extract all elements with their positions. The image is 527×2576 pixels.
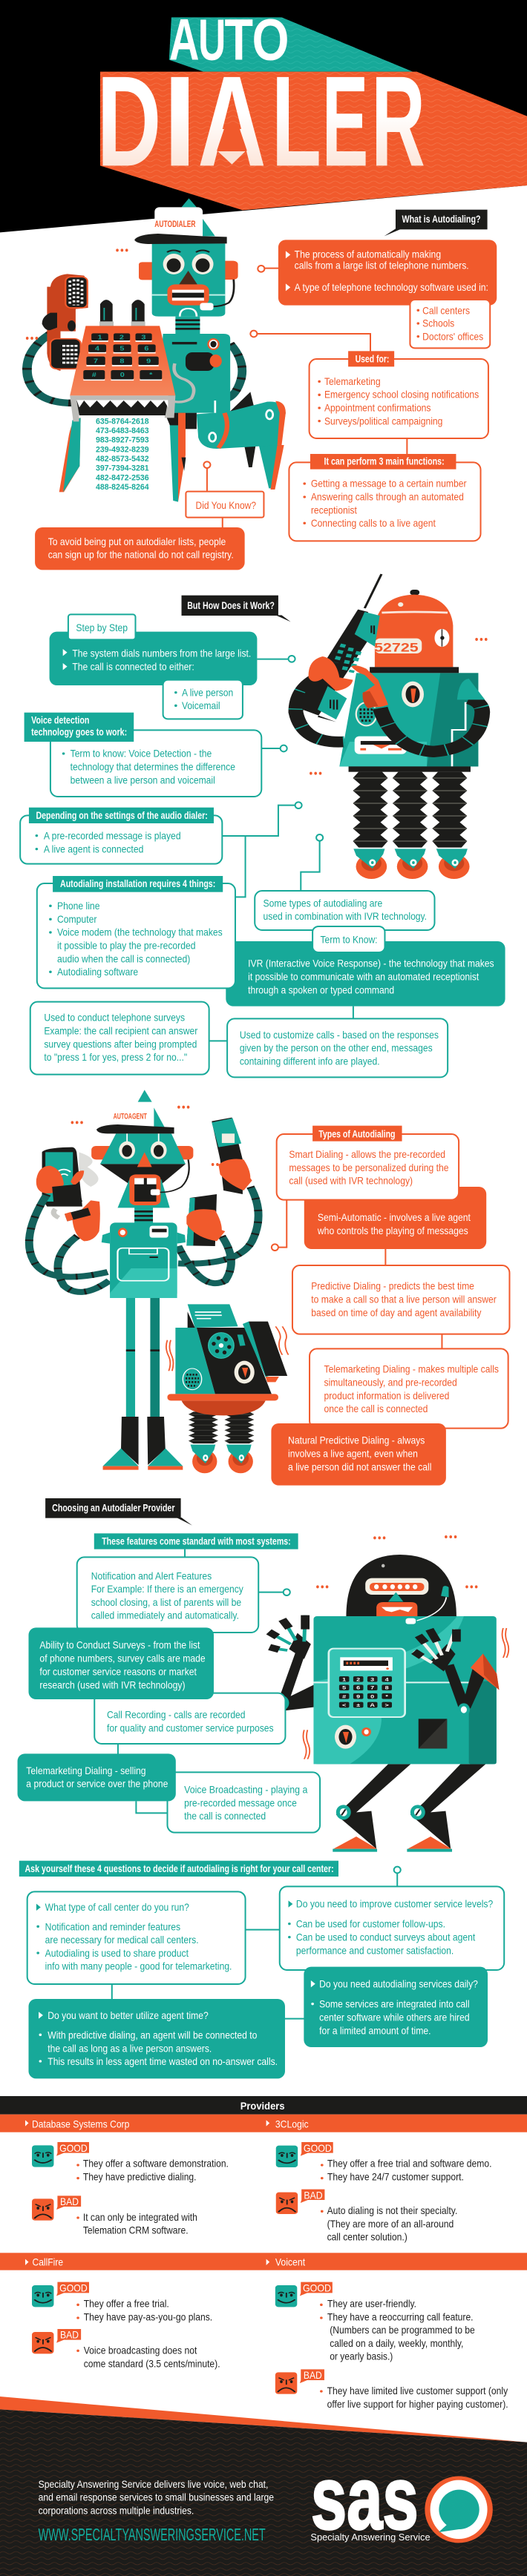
panel: three main functions: Connecting calls to a live agent — [311, 518, 436, 529]
panel: three main functions: receptionist — [311, 505, 357, 516]
provider: callfire: Voice broadcasting does not — [84, 2345, 197, 2356]
list: phone numbers: 473-6483-8463 — [96, 426, 149, 435]
panel: voice broadcasting — [167, 1772, 320, 1833]
section: header — [0, 0, 527, 306]
panel: where used: Call centers — [422, 306, 470, 317]
panel: do not call: can sign up for the national do not call registry. — [48, 550, 234, 561]
label: term to know — [312, 926, 384, 952]
panel: step by step — [50, 614, 257, 685]
heading: standard features — [94, 1533, 298, 1549]
panel: conduct surveys: Ability to Conduct Surveys - from the list — [39, 1640, 200, 1651]
panel: conduct surveys: research (used with IVR technology) — [39, 1680, 185, 1691]
panel: telemarketing dialing: simultaneously, and pre-recorded — [324, 1377, 457, 1389]
panel: customer service levels: Can be used for customer follow-ups. — [296, 1919, 445, 1930]
list: phone numbers: 488-8245-8264 — [96, 482, 149, 492]
title: DIALER: E — [322, 49, 368, 193]
panel: autodialing installation: Autodialing installation requires 4 things: — [60, 878, 215, 889]
panel: where used: Schools — [422, 318, 454, 329]
panel: used for: Used for: — [356, 354, 389, 365]
section: choosing a provider — [18, 1498, 508, 1852]
orange shadow behind DIALER — [100, 72, 527, 210]
bar: database systems and 3clogic — [0, 2115, 527, 2132]
panel: autodialing installation: Computer — [57, 914, 97, 925]
connector ring — [261, 745, 287, 751]
section: types of autodialing — [29, 1126, 509, 1486]
robot body and keypad — [27, 274, 286, 502]
panel: telemarketing dialing: once the call is connected — [324, 1403, 428, 1414]
robot: briefcase robot: # — [342, 1693, 347, 1699]
provider: voicent: or yearly basis.) — [330, 2351, 393, 2362]
provider: callfire — [32, 2282, 220, 2370]
provider: database systems corp: BAD — [60, 2196, 79, 2207]
heading: choosing a provider: Choosing an Autodialer Provider — [52, 1503, 175, 1514]
heading: providers — [0, 2096, 527, 2115]
panel: live person or voicemail: A live person — [182, 688, 233, 699]
provider: database systems corp: It can only be integrated with — [83, 2212, 197, 2223]
robot body and keypad: # — [92, 372, 97, 379]
footer: orange stripe — [0, 2397, 527, 2442]
panel: voice broadcasting: pre-recorded message once — [184, 1798, 297, 1809]
panel: used for: Surveys/political campaigning — [324, 416, 442, 427]
panel: audio dialer settings — [20, 808, 222, 864]
panel: voice detection: technology that determines the difference — [71, 762, 235, 773]
connector ring — [203, 461, 223, 528]
robot: briefcase robot: 7 — [370, 1685, 375, 1690]
label: did you know — [186, 492, 264, 518]
label: term to know: Term to Know: — [321, 935, 378, 946]
robot: autoagent head and devices — [36, 1090, 252, 1208]
logo: sas: Specialty Answering Service — [310, 2532, 431, 2543]
panel: natural predictive dialing: involves a live agent, even when — [288, 1449, 418, 1460]
panel: notification and alert features: Notification and Alert Features — [91, 1571, 212, 1582]
panel: voice detection: between a live person and voicemail — [71, 775, 215, 786]
robot body and keypad: 6 — [144, 346, 148, 352]
panel: natural predictive dialing: Natural Predictive Dialing - always — [288, 1435, 425, 1446]
title: AUTO: O — [252, 7, 289, 72]
logo: sas: sas — [311, 2448, 419, 2548]
panel: voice broadcasting: Voice Broadcasting - playing a — [184, 1785, 308, 1796]
robot: autoagent body — [29, 1185, 258, 1470]
panel: used for: Appointment confirmations — [324, 403, 431, 414]
panel: call recording: for quality and customer service purposes — [107, 1723, 274, 1734]
title: AUTO: U — [198, 7, 226, 72]
footer: description — [39, 2479, 274, 2517]
section: header: R — [371, 49, 425, 193]
panel: notification and alert features: For Example: If there is an emergency — [91, 1584, 243, 1595]
robot body and keypad: * — [149, 372, 153, 379]
panel: semi-automatic — [304, 1187, 486, 1249]
panel: IVR definition: through a spoken or typed command — [248, 985, 394, 996]
panel: smart dialing: call (used with IVR technology) — [289, 1176, 413, 1187]
robot: briefcase robot: 9 — [356, 1693, 361, 1699]
title: DIALER: D — [96, 49, 161, 193]
panel: agent time: With predictive dialing, an agent will be connected to — [48, 2030, 257, 2041]
robot body and keypad: 2 — [120, 335, 124, 341]
list: phone numbers: 482-8472-2536 — [96, 472, 149, 482]
panel: agent time: the call as long as a live person answers. — [48, 2043, 212, 2055]
panel: conduct surveys — [28, 1627, 214, 1699]
provider: 3clogic — [276, 2142, 491, 2243]
provider: 3clogic: call center solution.) — [327, 2232, 407, 2243]
panel: customer service levels — [280, 1886, 504, 1970]
robot: briefcase robot: ± — [356, 1702, 361, 1708]
panel: live person or voicemail — [163, 680, 243, 719]
panel: smart dialing: Smart Dialing - allows the pre-recorded — [289, 1149, 445, 1160]
panel: where used — [410, 300, 490, 348]
robot body and keypad: 0 — [120, 372, 125, 379]
provider: database systems corp — [32, 2142, 229, 2236]
provider: callfire: BAD — [60, 2330, 79, 2341]
section: autodialer robot — [134, 198, 238, 317]
panel: definition — [278, 240, 497, 306]
panel: services daily — [304, 1967, 488, 2047]
title: DIALER: A — [197, 49, 266, 193]
provider: voicent — [275, 2282, 508, 2410]
robot: briefcase robot: > — [385, 1702, 389, 1708]
panel: agent time — [28, 1999, 285, 2078]
panel: audio dialer settings: Depending on the settings of the audio dialer: — [36, 810, 208, 821]
panel: predictive dialing — [292, 1265, 509, 1334]
panel: agent time: Do you want to better utilize agent time? — [48, 2010, 209, 2021]
panel: IVR combination: Some types of autodialing are — [264, 898, 382, 909]
provider: database systems corp: Telemation CRM software. — [83, 2225, 189, 2236]
panel: voice detection: Voice detection — [31, 715, 89, 726]
robot: briefcase robot: 2 — [356, 1676, 361, 1682]
panel: telemarketing dialing — [310, 1348, 508, 1429]
provider: voicent: BAD — [304, 2370, 322, 2381]
title: letter A notch — [217, 124, 247, 165]
connector lines — [385, 1249, 442, 1348]
provider: voicent: GOOD — [303, 2283, 331, 2294]
provider: 3clogic: (They are more of an all-around — [327, 2218, 454, 2230]
provider: voicent: They are user-friendly. — [327, 2299, 416, 2310]
panel: IVR definition — [226, 941, 505, 1007]
panel: step by step: Step by Step — [76, 622, 128, 633]
panel: IVR combination: used in combination with IVR technology. — [264, 911, 427, 922]
panel: do not call — [35, 527, 245, 570]
connector ring — [250, 331, 370, 352]
panel: autodialing installation: Phone line — [57, 900, 99, 912]
bar: database systems and 3clogic: 3CLogic — [275, 2119, 309, 2130]
robot: autodialer: AUTODIALER — [154, 220, 196, 229]
label: did you know: Did You Know? — [196, 500, 256, 511]
panel: used for: Telemarketing — [324, 376, 381, 387]
panel: autodialing installation — [37, 876, 235, 988]
panel: smart dialing: messages to be personalized during the — [289, 1162, 449, 1173]
title: AUTO: T — [224, 7, 253, 72]
robot body and keypad: 8 — [120, 358, 124, 365]
footer: description: corporations across multiple industries. — [39, 2506, 194, 2517]
provider: callfire: come standard (3.5 cents/minute). — [84, 2359, 220, 2370]
panel: type of call center: Notification and reminder features — [45, 1922, 180, 1933]
panel: autodialing installation: Autodialing software — [57, 966, 138, 978]
panel: notification and alert features — [77, 1557, 258, 1633]
panel: smart dialing — [277, 1126, 459, 1200]
panel: audio dialer settings: A live agent is connected — [44, 844, 143, 855]
provider: 3clogic: GOOD — [304, 2143, 332, 2154]
panel: three main functions — [289, 454, 481, 541]
robot body and keypad: 9 — [146, 358, 151, 365]
list: phone numbers: 635-8764-2618 — [96, 416, 149, 426]
robot: phone robot — [295, 574, 485, 879]
panel: natural predictive dialing: a live person did not answer the call — [288, 1462, 431, 1473]
title: DIALER: L — [272, 49, 321, 193]
dots — [26, 248, 337, 493]
panel: telephone surveys — [30, 1002, 209, 1075]
list: phone numbers: 482-8573-5432 — [96, 454, 149, 464]
panel: type of call center: Autodialing is used to share product — [45, 1948, 189, 1959]
text: WWW.SPECIALTYANSWERINGSERVICE.NET — [39, 2525, 266, 2544]
bar: callfire and voicent: Voicent — [275, 2257, 305, 2268]
teal shadow behind AUTO — [169, 17, 413, 72]
robot: briefcase robot — [269, 1555, 508, 1852]
panel: services daily: for a limited amount of time. — [319, 2026, 431, 2037]
panel: notification and alert features: called immediately and automatically. — [91, 1610, 239, 1621]
panel: natural predictive dialing — [271, 1423, 446, 1486]
heading: what is autodialing — [384, 210, 488, 236]
panel: live person or voicemail: Voicemail — [182, 700, 220, 711]
robot: briefcase robot: 6 — [356, 1685, 361, 1690]
dots — [316, 1535, 477, 1588]
robot: briefcase robot: 5 — [342, 1685, 347, 1690]
connector line — [136, 1801, 167, 1813]
panel: IVR combination — [255, 891, 434, 930]
section: how it works — [20, 574, 488, 897]
provider: 3clogic: Auto dialing is not their specialty. — [327, 2205, 457, 2216]
robot body and keypad: 1 — [97, 335, 102, 341]
panel: step by step: The system dials numbers from the large list. — [72, 648, 251, 659]
robot: autoagent head and devices: AUTOAGENT — [114, 1111, 147, 1121]
panel: call recording — [94, 1693, 285, 1744]
list: phone numbers: 397-7394-3281 — [96, 464, 149, 472]
panel: voice broadcasting: the call is connected — [184, 1811, 266, 1822]
heading: providers: Providers — [240, 2101, 285, 2112]
robot: briefcase robot: 1 — [342, 1676, 347, 1682]
section: four questions — [19, 1861, 504, 2078]
panel: autodialing installation: audio when the call is connected) — [57, 954, 190, 965]
panel: conduct surveys: of phone numbers, survey calls are made — [39, 1653, 206, 1664]
robot body and keypad: 7 — [94, 358, 98, 365]
panel: voice detection: technology goes to work: — [31, 727, 127, 738]
connector ring — [258, 266, 279, 272]
panel: telephone surveys: Example: the call recipient can answer — [44, 1026, 198, 1037]
heading: how does it work — [182, 596, 291, 622]
list: phone numbers: 983-8927-7593 — [96, 435, 149, 444]
panel: telephone surveys: Used to conduct telephone surveys — [44, 1012, 185, 1024]
panel: telemarketing dialing — [18, 1753, 176, 1801]
panel: smart dialing: Types of Autodialing — [318, 1129, 396, 1140]
panel: type of call center: What type of call center do you run? — [45, 1902, 189, 1913]
panel: customize calls: given by the person on the other end, messages — [240, 1043, 433, 1054]
list: phone numbers — [96, 416, 149, 492]
provider: callfire: They have pay-as-you-go plans. — [84, 2312, 212, 2323]
robot: briefcase robot: 0 — [370, 1693, 375, 1699]
connector line — [118, 1549, 185, 1754]
section: IVR panels — [30, 876, 505, 1208]
robot: briefcase robot: 4 — [385, 1676, 389, 1682]
provider: database systems corp: They offer a software demonstration. — [83, 2158, 229, 2170]
panel: customize calls — [227, 1018, 448, 1077]
connector line — [406, 438, 407, 455]
bar: callfire and voicent: CallFire — [32, 2257, 63, 2268]
provider: database systems corp: GOOD — [59, 2143, 88, 2154]
panel: do not call: To avoid being put on autodialer lists, people — [48, 536, 226, 547]
title: AUTO: A — [169, 7, 200, 72]
panel: type of call center: info with many people - good for telemarketing. — [45, 1961, 232, 1972]
panel: autodialing installation: Voice modem (the technology that makes — [57, 927, 223, 938]
panel: voice detection: Term to know: Voice Detection - the — [71, 748, 212, 760]
panel: telemarketing dialing: a product or service over the phone — [26, 1779, 168, 1790]
robot body and keypad: 5 — [120, 346, 125, 352]
panel: agent time: This results in less agent time wasted on no-answer calls. — [48, 2056, 278, 2067]
panel: call recording: Call Recording - calls are recorded — [107, 1710, 246, 1721]
connector ring — [272, 1200, 287, 1251]
footer: description: and email response services to small businesses and large — [39, 2492, 274, 2503]
panel: conduct surveys: for customer service reasons or market — [39, 1667, 197, 1678]
connector ring — [112, 1867, 401, 2019]
dots — [310, 638, 488, 775]
robot: phone robot: 52725 — [374, 641, 419, 655]
robot: briefcase robot: * — [385, 1693, 389, 1699]
panel: telephone surveys: survey questions after being prompted — [44, 1039, 197, 1050]
list: phone numbers: 239-4932-8239 — [96, 444, 149, 454]
panel: telemarketing dialing: product information is delivered — [324, 1391, 449, 1402]
heading: how does it work: But How Does it Work? — [187, 600, 275, 611]
panel: autodialing installation: it possible to play the pre-recorded — [57, 941, 196, 952]
connector lines — [209, 1007, 353, 1041]
footer: dark background — [0, 2409, 527, 2576]
connector ring — [257, 656, 295, 662]
panel: used for — [310, 351, 488, 438]
heading: choosing a provider — [45, 1498, 192, 1526]
connector ring — [301, 834, 323, 892]
provider: database systems corp: They have predictive dialing. — [83, 2172, 196, 2183]
panel: customize calls: containing different info are played. — [240, 1056, 380, 1067]
footer: description: Specialty Answering Service delivers live voice, web chat, — [39, 2479, 268, 2490]
robot: briefcase robot: A — [370, 1702, 375, 1708]
panel: voice detection — [24, 713, 261, 797]
robot: fax machine — [166, 1304, 289, 1473]
provider: callfire: GOOD — [59, 2283, 88, 2294]
connector ring — [222, 802, 302, 897]
title: DIALER: I — [163, 49, 197, 193]
heading: standard features: These features come standard with most systems: — [102, 1536, 291, 1547]
robot: briefcase robot: 8 — [385, 1685, 389, 1690]
bar: database systems and 3clogic: Database Systems Corp — [32, 2119, 129, 2130]
robot: briefcase robot: 3 — [370, 1676, 375, 1682]
robot body and keypad: 3 — [141, 335, 145, 341]
robot body and keypad: 4 — [95, 346, 100, 352]
panel: audio dialer settings: A pre-recorded message is played — [44, 831, 181, 842]
panel: notification and alert features: school closing, a list of parents will be — [91, 1597, 241, 1608]
panel: step by step: The call is connected to either: — [72, 662, 194, 673]
robot: briefcase robot: < — [342, 1702, 347, 1708]
black header background — [0, 0, 527, 232]
provider: 3clogic: BAD — [304, 2190, 323, 2201]
connector ring — [258, 1589, 290, 1595]
panel: definition: The process of automatically making — [295, 249, 441, 260]
panel: telephone surveys: to "press 1 for yes, press 2 for no..." — [44, 1052, 187, 1063]
panel: type of call center — [27, 1891, 246, 1984]
heading: four questions — [19, 1861, 338, 1877]
bar: callfire and voicent — [0, 2253, 527, 2270]
panel: where used: Doctors' offices — [422, 332, 483, 343]
robot: autodialer — [134, 198, 238, 317]
panel: telemarketing dialing: Telemarketing Dialing - selling — [26, 1765, 146, 1776]
panel: type of call center: are necessary for medical call centers. — [45, 1934, 199, 1946]
section: providers — [0, 2096, 527, 2270]
provider: callfire: They offer a free trial. — [84, 2299, 169, 2310]
